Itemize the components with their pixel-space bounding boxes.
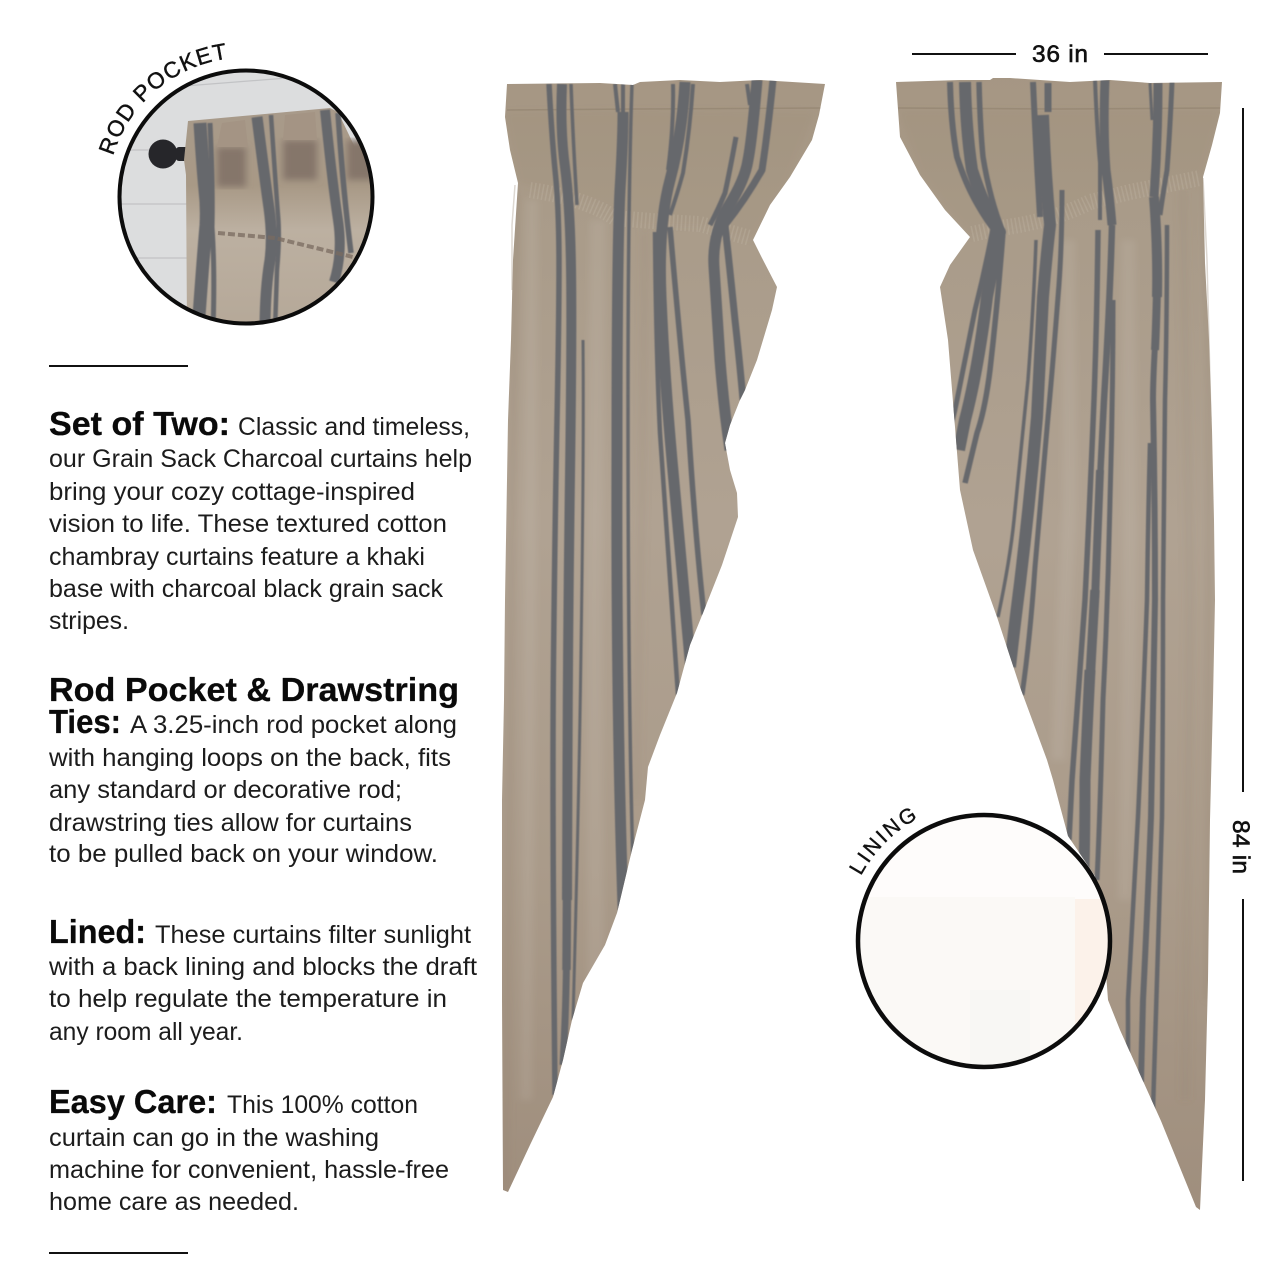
text block: rod pocket and drawstring ties [48,672,459,868]
text block: easy care: Easy Care: [49,1084,217,1121]
right curtain panel [885,70,1230,1220]
text block: lined: Lined: [49,914,146,951]
text block: rod pocket and drawstring ties: drawstring ties allow for curtains [49,809,412,837]
rod pocket label: ROD POCKET [98,43,225,154]
text block: lined [48,914,477,1046]
lining swatch [860,890,1108,1064]
rod pocket photo illustration [122,72,370,322]
fabric [184,108,380,330]
lining label: LINING [849,808,916,875]
ring [858,815,1110,1067]
callout: rod pocket detail circle [98,43,374,326]
text block: easy care: curtain can go in the washing [49,1124,379,1152]
text block: set of two [49,406,472,635]
text block: set of two: bring your cozy cottage-inspired [49,478,415,506]
dimension: height 84 in: 84 in [1227,820,1254,874]
text block: rod pocket and drawstring ties: Ties: [49,704,121,741]
text block: easy care: This 100% cotton [227,1091,418,1119]
text block: rod pocket and drawstring ties: any standard or decorative rod; [49,776,402,804]
ring [120,70,372,324]
text block: easy care: machine for convenient, hassle-free [49,1156,449,1184]
text block: set of two: Set of Two: [49,406,230,443]
callout: lining detail circle [849,808,1112,1070]
drawstring left [512,185,515,290]
text block: lined: any room all year. [49,1018,243,1046]
drawstring right [1203,178,1211,420]
text block: rod pocket and drawstring ties: to be pulled back on your window. [49,840,438,868]
right curtain fabric and stripes [885,70,1230,1220]
text block: easy care [49,1084,449,1216]
text block: lined: with a back lining and blocks the draft [48,953,477,981]
left curtain fabric and stripes [495,70,835,1200]
text block: lined: to help regulate the temperature in [49,985,447,1013]
text block: rod pocket and drawstring ties: Rod Pocket & Drawstring [49,672,459,709]
text block: set of two: our Grain Sack Charcoal curtains help [49,445,472,473]
rule: top of text column [49,365,188,367]
text block: set of two: stripes. [49,607,129,635]
text block: easy care: home care as needed. [49,1188,299,1216]
gather shirring left [530,190,750,238]
dimension: width 36 in: 36 in [1032,41,1088,68]
gather shirring right [972,178,1200,234]
text block: set of two: chambray curtains feature a khaki [49,543,425,571]
finial and rod [148,140,188,168]
text block: lined: These curtains filter sunlight [155,921,471,949]
left curtain panel [495,70,835,1200]
text block: set of two: vision to life. These textured cotton [49,510,447,538]
text block: rod pocket and drawstring ties: A 3.25-inch rod pocket along [130,711,457,739]
text block: set of two: base with charcoal black grain sack [49,575,444,603]
text block: set of two: Classic and timeless, [238,413,470,441]
rule: bottom of text column [49,1252,188,1254]
text block: rod pocket and drawstring ties: with hanging loops on the back, fits [48,744,451,772]
